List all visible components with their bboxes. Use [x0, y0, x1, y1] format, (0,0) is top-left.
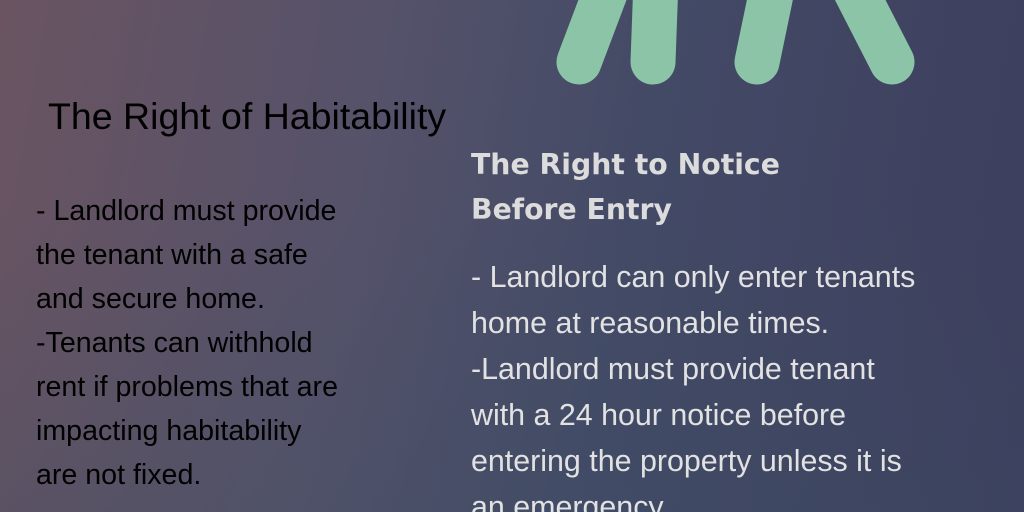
text block: notice details: - Landlord can only enter tenants [471, 260, 915, 294]
text block: habitability details: are not fixed. [36, 459, 201, 491]
text block: notice details: home at reasonable times. [471, 306, 829, 340]
text block: habitability details: and secure home. [36, 283, 265, 315]
text block: habitability details [36, 195, 338, 491]
text block: notice details [471, 260, 915, 512]
icon: green figure bars [556, 0, 914, 84]
text block: notice details: with a 24 hour notice before [471, 398, 846, 432]
title: habitability: The Right of Habitability [48, 95, 446, 137]
text block: habitability details: rent if problems that are [36, 371, 338, 403]
text block: habitability details: the tenant with a safe [36, 239, 308, 271]
text block: habitability details: -Tenants can withhold [36, 327, 313, 359]
text block: habitability details: - Landlord must provide [36, 195, 336, 227]
heading: notice before entry [471, 148, 780, 226]
text block: notice details: -Landlord must provide tenant [471, 352, 875, 386]
heading: notice before entry: The Right to Notice [471, 148, 780, 181]
heading: notice before entry: Before Entry [471, 193, 672, 226]
text block: notice details: entering the property unless it is [471, 444, 902, 478]
text block: habitability details: impacting habitability [36, 415, 301, 447]
